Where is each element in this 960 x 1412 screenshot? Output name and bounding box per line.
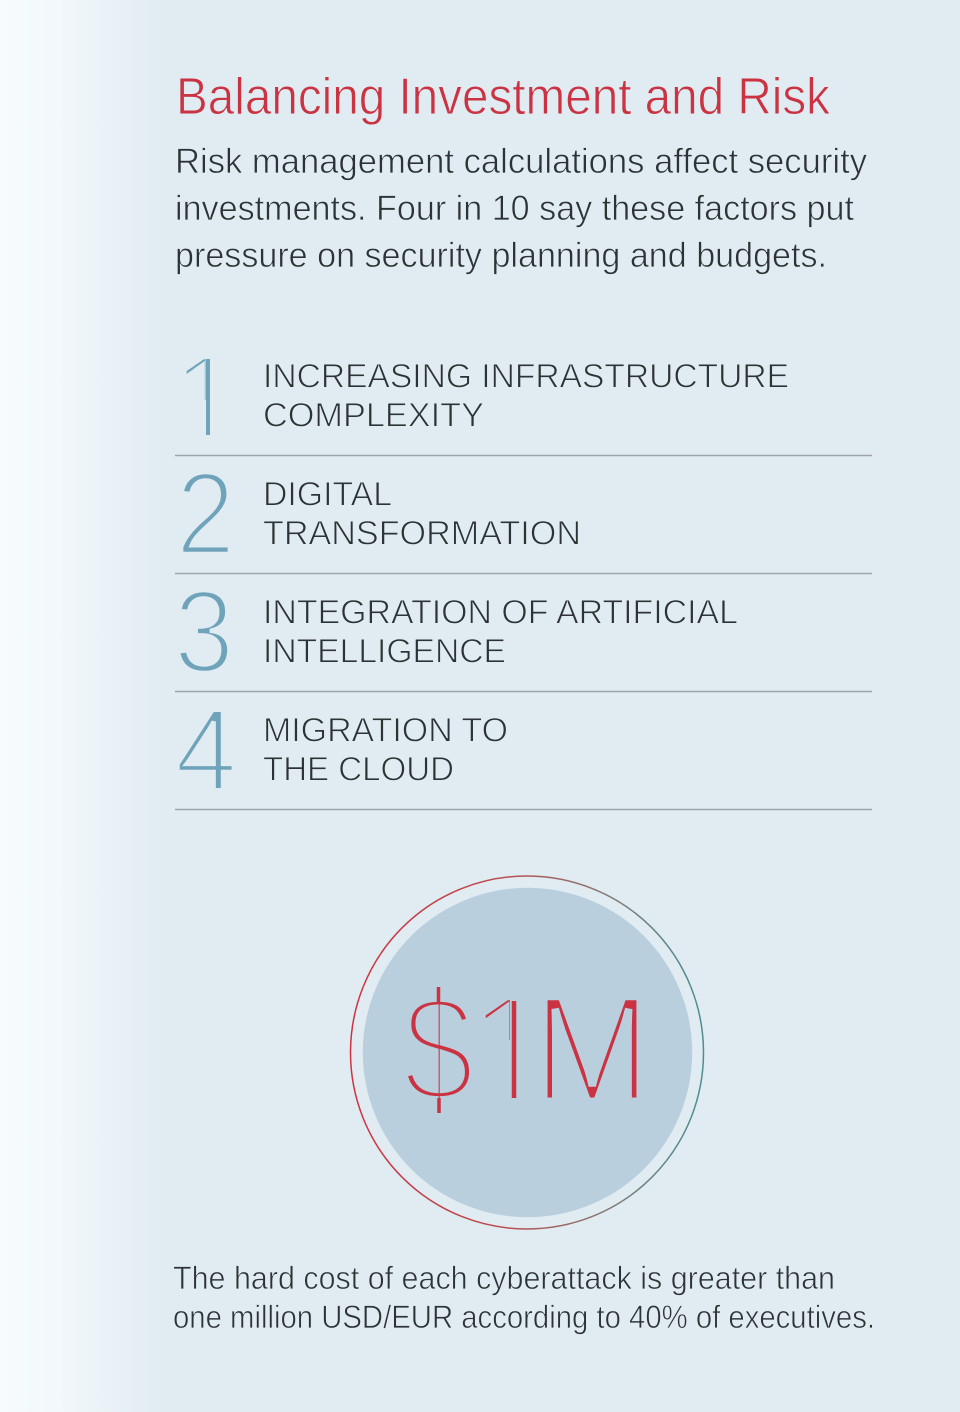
list item 4: THE CLOUD	[263, 750, 454, 788]
list item 3: INTEGRATION OF ARTIFICIAL	[263, 594, 738, 632]
list item 4: MIGRATION TO	[263, 712, 508, 750]
list item 1	[186, 359, 788, 435]
title: Balancing Investment and Risk	[176, 68, 831, 126]
circle callout: $1M	[350, 876, 704, 1229]
stat value: M	[532, 964, 652, 1134]
list item 2: 2	[176, 448, 235, 579]
list item 2: TRANSFORMATION	[263, 514, 581, 552]
ranked list of pressure factors	[173, 331, 872, 815]
footnote text block: one million USD/EUR according to 40% of executives.	[173, 1299, 875, 1335]
stat value: $	[402, 964, 474, 1134]
stat value	[408, 987, 636, 1113]
list item 3	[174, 566, 738, 697]
stat value: 1	[467, 964, 552, 1134]
list item 3: 3	[174, 566, 234, 697]
footnote text block	[173, 1260, 875, 1335]
list item 1: INCREASING INFRASTRUCTURE	[263, 358, 789, 396]
footnote text block: The hard cost of each cyberattack is greater than	[173, 1260, 835, 1296]
intro text block: investments. Four in 10 say these factors put	[175, 188, 854, 228]
list item 1: 1	[173, 331, 238, 462]
intro text block: Risk management calculations affect security	[175, 141, 867, 181]
list item 4: 4	[175, 684, 237, 815]
list item 4	[175, 684, 508, 815]
list item 2: DIGITAL	[263, 476, 392, 514]
list item 2	[176, 448, 581, 579]
list item 1: COMPLEXITY	[263, 396, 484, 434]
intro text block: pressure on security planning and budgets.	[175, 235, 827, 275]
list item 3: INTELLIGENCE	[263, 632, 506, 670]
intro text block	[175, 141, 867, 275]
